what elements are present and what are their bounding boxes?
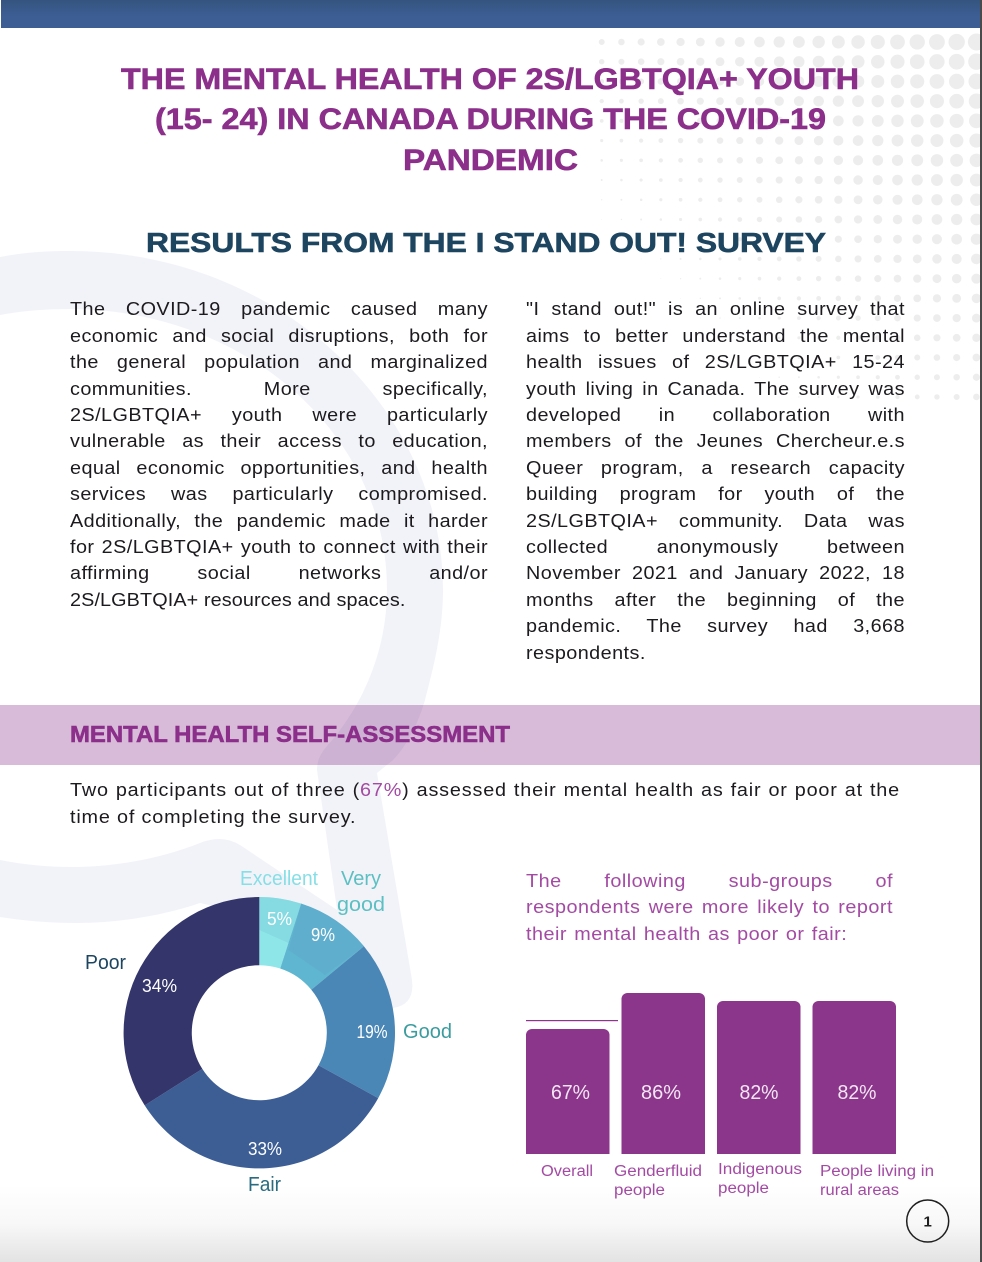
text block: right intro paragraph: pandemic. The survey had 3,668 bbox=[526, 616, 905, 636]
text block: right intro paragraph: members of the Jeunes Chercheur.e.s bbox=[526, 431, 905, 451]
text block: left intro paragraph: economic and social disruptions, both for bbox=[70, 326, 488, 346]
donut chart labels: Poor bbox=[85, 952, 126, 974]
text block: right intro paragraph: Queer program, a research capacity bbox=[526, 458, 905, 478]
text block: sub-groups intro bbox=[526, 871, 893, 944]
donut chart labels: 19% bbox=[356, 1022, 388, 1042]
bar labels: rural areas bbox=[820, 1182, 899, 1199]
text block: left intro paragraph: Additionally, the pandemic made it harder bbox=[70, 511, 488, 531]
bar: indigenous people 82% bbox=[717, 1001, 800, 1154]
donut chart labels: 33% bbox=[248, 1139, 282, 1159]
text block: left intro paragraph: communities. More specifically, bbox=[70, 379, 488, 399]
text block: right intro paragraph: months after the beginning of the bbox=[526, 590, 905, 610]
text block: self-assessment summary: Two participants out of three (67%) assessed their mental health as fair or poor at the bbox=[70, 780, 900, 800]
text block: left intro paragraph: 2S/LGBTQIA+ resources and spaces. bbox=[70, 590, 405, 610]
title: (15- 24) IN CANADA DURING THE COVID-19 bbox=[155, 103, 826, 136]
text block: left intro paragraph bbox=[70, 299, 488, 610]
text block: sub-groups intro: their mental health as poor or fair: bbox=[526, 924, 847, 944]
bar labels bbox=[541, 1161, 934, 1199]
text block: left intro paragraph: The COVID-19 pandemic caused many bbox=[70, 299, 488, 319]
subtitle: RESULTS FROM THE I STAND OUT! SURVEY bbox=[146, 227, 826, 258]
bar: people living in rural areas 82%: 82% bbox=[838, 1082, 877, 1104]
text block: right intro paragraph: 2S/LGBTQIA+ community. Data was bbox=[526, 511, 905, 531]
donut chart labels: Good bbox=[403, 1021, 452, 1043]
bar: overall 67% bbox=[526, 1029, 610, 1154]
text block: left intro paragraph: affirming social networks and/or bbox=[70, 563, 488, 583]
donut chart labels: Fair bbox=[248, 1174, 281, 1196]
text block: left intro paragraph: the general population and marginalized bbox=[70, 352, 488, 372]
bar labels: Genderfluid bbox=[614, 1163, 702, 1180]
segment: fair 33% bbox=[145, 1065, 378, 1168]
text block: right intro paragraph bbox=[526, 299, 905, 663]
section heading: MENTAL HEALTH SELF-ASSESSMENT bbox=[70, 721, 511, 747]
donut chart labels: 5% bbox=[267, 909, 292, 929]
text block: left intro paragraph: services was particularly compromised. bbox=[70, 484, 488, 504]
bar: genderfluid people 86%: 86% bbox=[641, 1082, 681, 1104]
text block: sub-groups intro: The following sub-groups of bbox=[526, 871, 893, 891]
text block: right intro paragraph: November 2021 and January 2022, 18 bbox=[526, 563, 905, 583]
bar labels: Indigenous bbox=[718, 1161, 802, 1178]
text block: self-assessment summary bbox=[70, 780, 900, 827]
segment: good 19% bbox=[311, 946, 395, 1098]
page number: 1 bbox=[924, 1214, 932, 1230]
text block: right intro paragraph: respondents. bbox=[526, 643, 646, 663]
text block: left intro paragraph: equal economic opportunities, and health bbox=[70, 458, 488, 478]
text block: right intro paragraph: "I stand out!" is an online survey that bbox=[526, 299, 905, 319]
text block: left intro paragraph: for 2S/LGBTQIA+ youth to connect with their bbox=[70, 537, 488, 557]
bar: overall 67%: 67% bbox=[551, 1082, 590, 1104]
bar: indigenous people 82%: 82% bbox=[740, 1082, 779, 1104]
section band background bbox=[0, 705, 980, 765]
bar: people living in rural areas 82% bbox=[812, 1001, 896, 1154]
title: PANDEMIC bbox=[403, 144, 578, 177]
donut chart labels: 34% bbox=[142, 976, 177, 996]
bar labels: Overall bbox=[541, 1163, 593, 1180]
top header bar bbox=[1, 0, 980, 28]
title: THE MENTAL HEALTH OF 2S/LGBTQIA+ YOUTH bbox=[121, 63, 859, 96]
right page edge bbox=[980, 0, 982, 1262]
text block: left intro paragraph: vulnerable as their access to education, bbox=[70, 431, 488, 451]
text block: right intro paragraph: aims to better understand the mental bbox=[526, 326, 905, 346]
text block: sub-groups intro: respondents were more likely to report bbox=[526, 897, 893, 917]
reference line bbox=[526, 1020, 618, 1021]
text block: right intro paragraph: youth living in Canada. The survey was bbox=[526, 379, 905, 399]
bar: genderfluid people 86% bbox=[622, 993, 705, 1154]
segment: poor 34% bbox=[124, 897, 259, 1105]
donut chart labels: good bbox=[337, 894, 385, 916]
text block: left intro paragraph: 2S/LGBTQIA+ youth were particularly bbox=[70, 405, 488, 425]
bar labels: people bbox=[718, 1180, 769, 1197]
donut chart labels: Excellent bbox=[240, 868, 318, 890]
text block: right intro paragraph: health issues of 2S/LGBTQIA+ 15-24 bbox=[526, 352, 905, 372]
text block: right intro paragraph: building program for youth of the bbox=[526, 484, 905, 504]
bottom page shading bbox=[0, 1185, 982, 1262]
text block: right intro paragraph: developed in collaboration with bbox=[526, 405, 905, 425]
text block: right intro paragraph: collected anonymously between bbox=[526, 537, 905, 557]
bar labels: people bbox=[614, 1182, 665, 1199]
donut chart labels: Very bbox=[341, 868, 381, 890]
bar labels: People living in bbox=[820, 1163, 934, 1180]
donut chart labels: 9% bbox=[311, 925, 335, 945]
segment: excellent 5% bbox=[259, 897, 301, 968]
segment: very good 9% bbox=[280, 904, 364, 990]
text block: self-assessment summary: time of completing the survey. bbox=[70, 807, 356, 827]
